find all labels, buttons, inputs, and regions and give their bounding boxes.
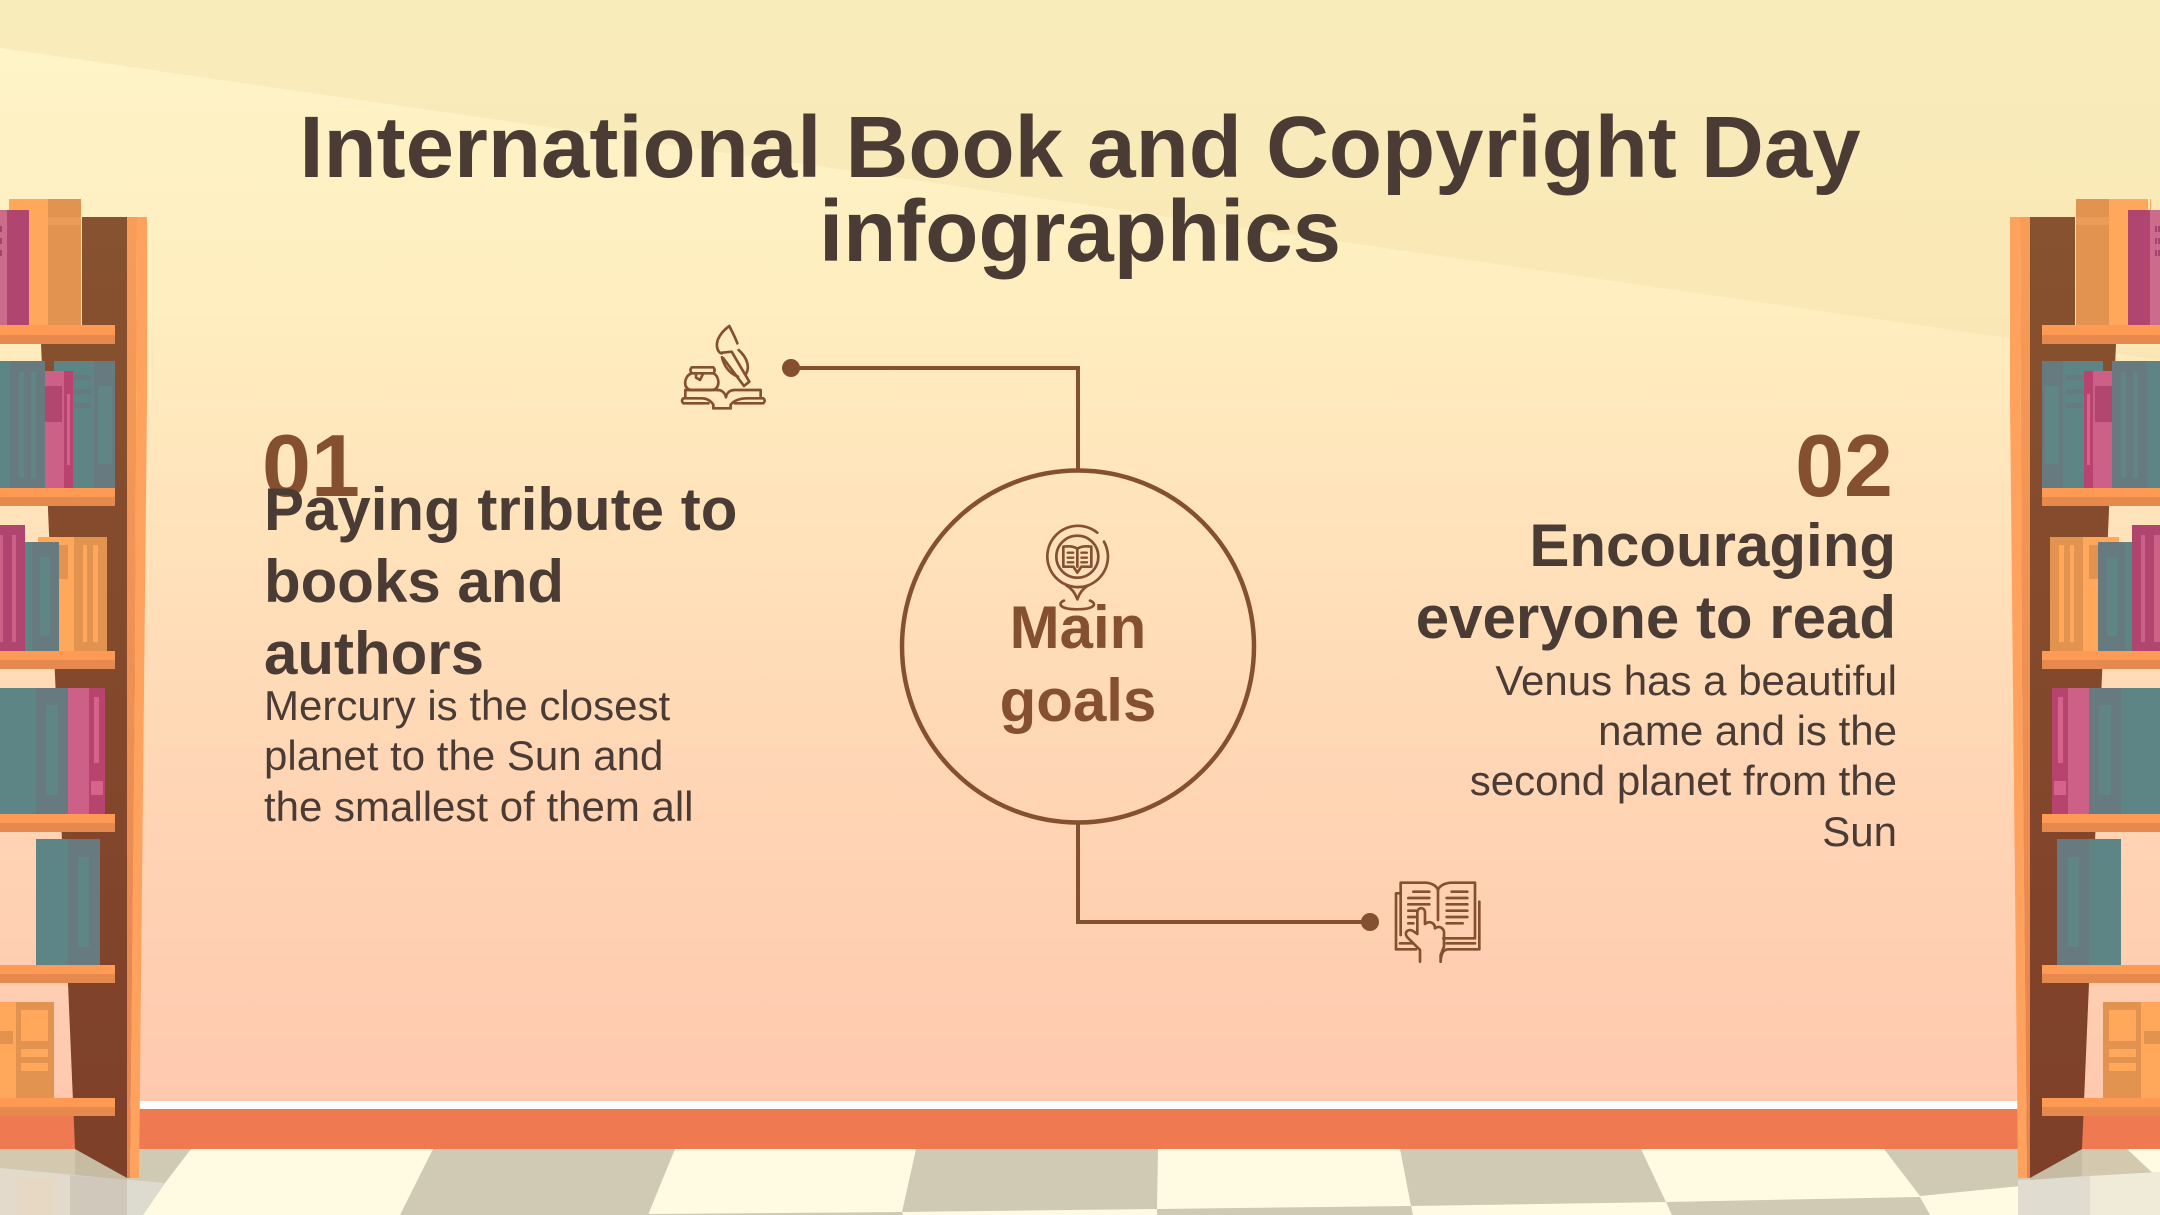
heading 02: Encouraging: [1529, 512, 1896, 579]
ceiling light wedge: [0, 0, 2160, 360]
center label: goals: [1000, 667, 1156, 734]
icon: quill, ink pot and book: [682, 326, 765, 408]
books row 4: [0, 688, 105, 814]
side plank: [127, 217, 147, 1178]
connector bottom: [1078, 822, 1379, 931]
panel: goal 02: [1416, 416, 1897, 855]
title: International Book and Copyright Day: [299, 99, 1861, 196]
icon: hand reading book: [1396, 883, 1479, 962]
books row 3: [0, 525, 107, 651]
title: infographics: [819, 183, 1341, 280]
number 01: 01: [262, 416, 360, 515]
center label: [1000, 594, 1156, 734]
shelf board 6: [0, 1098, 115, 1116]
icon: open book in pin: [1047, 526, 1108, 609]
shelf board 2: [0, 488, 115, 506]
bookshelf left: [0, 199, 147, 1178]
number 02: 02: [1795, 416, 1893, 515]
body 01: planet to the Sun and: [264, 732, 663, 779]
heading 01: books and: [264, 548, 564, 615]
books row 5: [36, 839, 100, 965]
shelf board 5: [0, 965, 115, 983]
shelf board 3: [0, 651, 115, 669]
bookshelf right: [2010, 199, 2160, 1178]
shelf back panel: [41, 217, 127, 1178]
title: [299, 99, 1861, 280]
body 01: [264, 682, 694, 830]
body 01: Mercury is the closest: [264, 682, 670, 729]
white skirting strip: [130, 1101, 2030, 1109]
center label: Main: [1010, 594, 1146, 661]
books row 2: [0, 361, 115, 488]
heading 01: Paying tribute to: [264, 476, 737, 543]
body 02: Venus has a beautiful: [1495, 657, 1897, 704]
body 02: [1470, 657, 1897, 855]
left floor reflection: [0, 1149, 165, 1215]
heading 01: [264, 476, 737, 687]
body 02: Sun: [1822, 808, 1897, 855]
heading 02: everyone to read: [1416, 584, 1896, 651]
books row 6: [0, 1002, 54, 1098]
shelf board 1: [0, 325, 115, 344]
shelf board 4: [0, 814, 115, 832]
connector top: [782, 359, 1078, 470]
books row 1: [0, 199, 81, 325]
central circle: [902, 470, 1254, 822]
body 02: name and is the: [1598, 707, 1897, 754]
heading 01: authors: [264, 620, 484, 687]
heading 02: [1416, 512, 1896, 651]
body 01: the smallest of them all: [264, 783, 694, 830]
orange baseboard: [0, 1109, 2160, 1149]
panel: goal 01: [262, 416, 737, 830]
checkered floor: [0, 1149, 2160, 1215]
body 02: second planet from the: [1470, 757, 1897, 804]
right floor reflection: [2018, 1149, 2160, 1215]
